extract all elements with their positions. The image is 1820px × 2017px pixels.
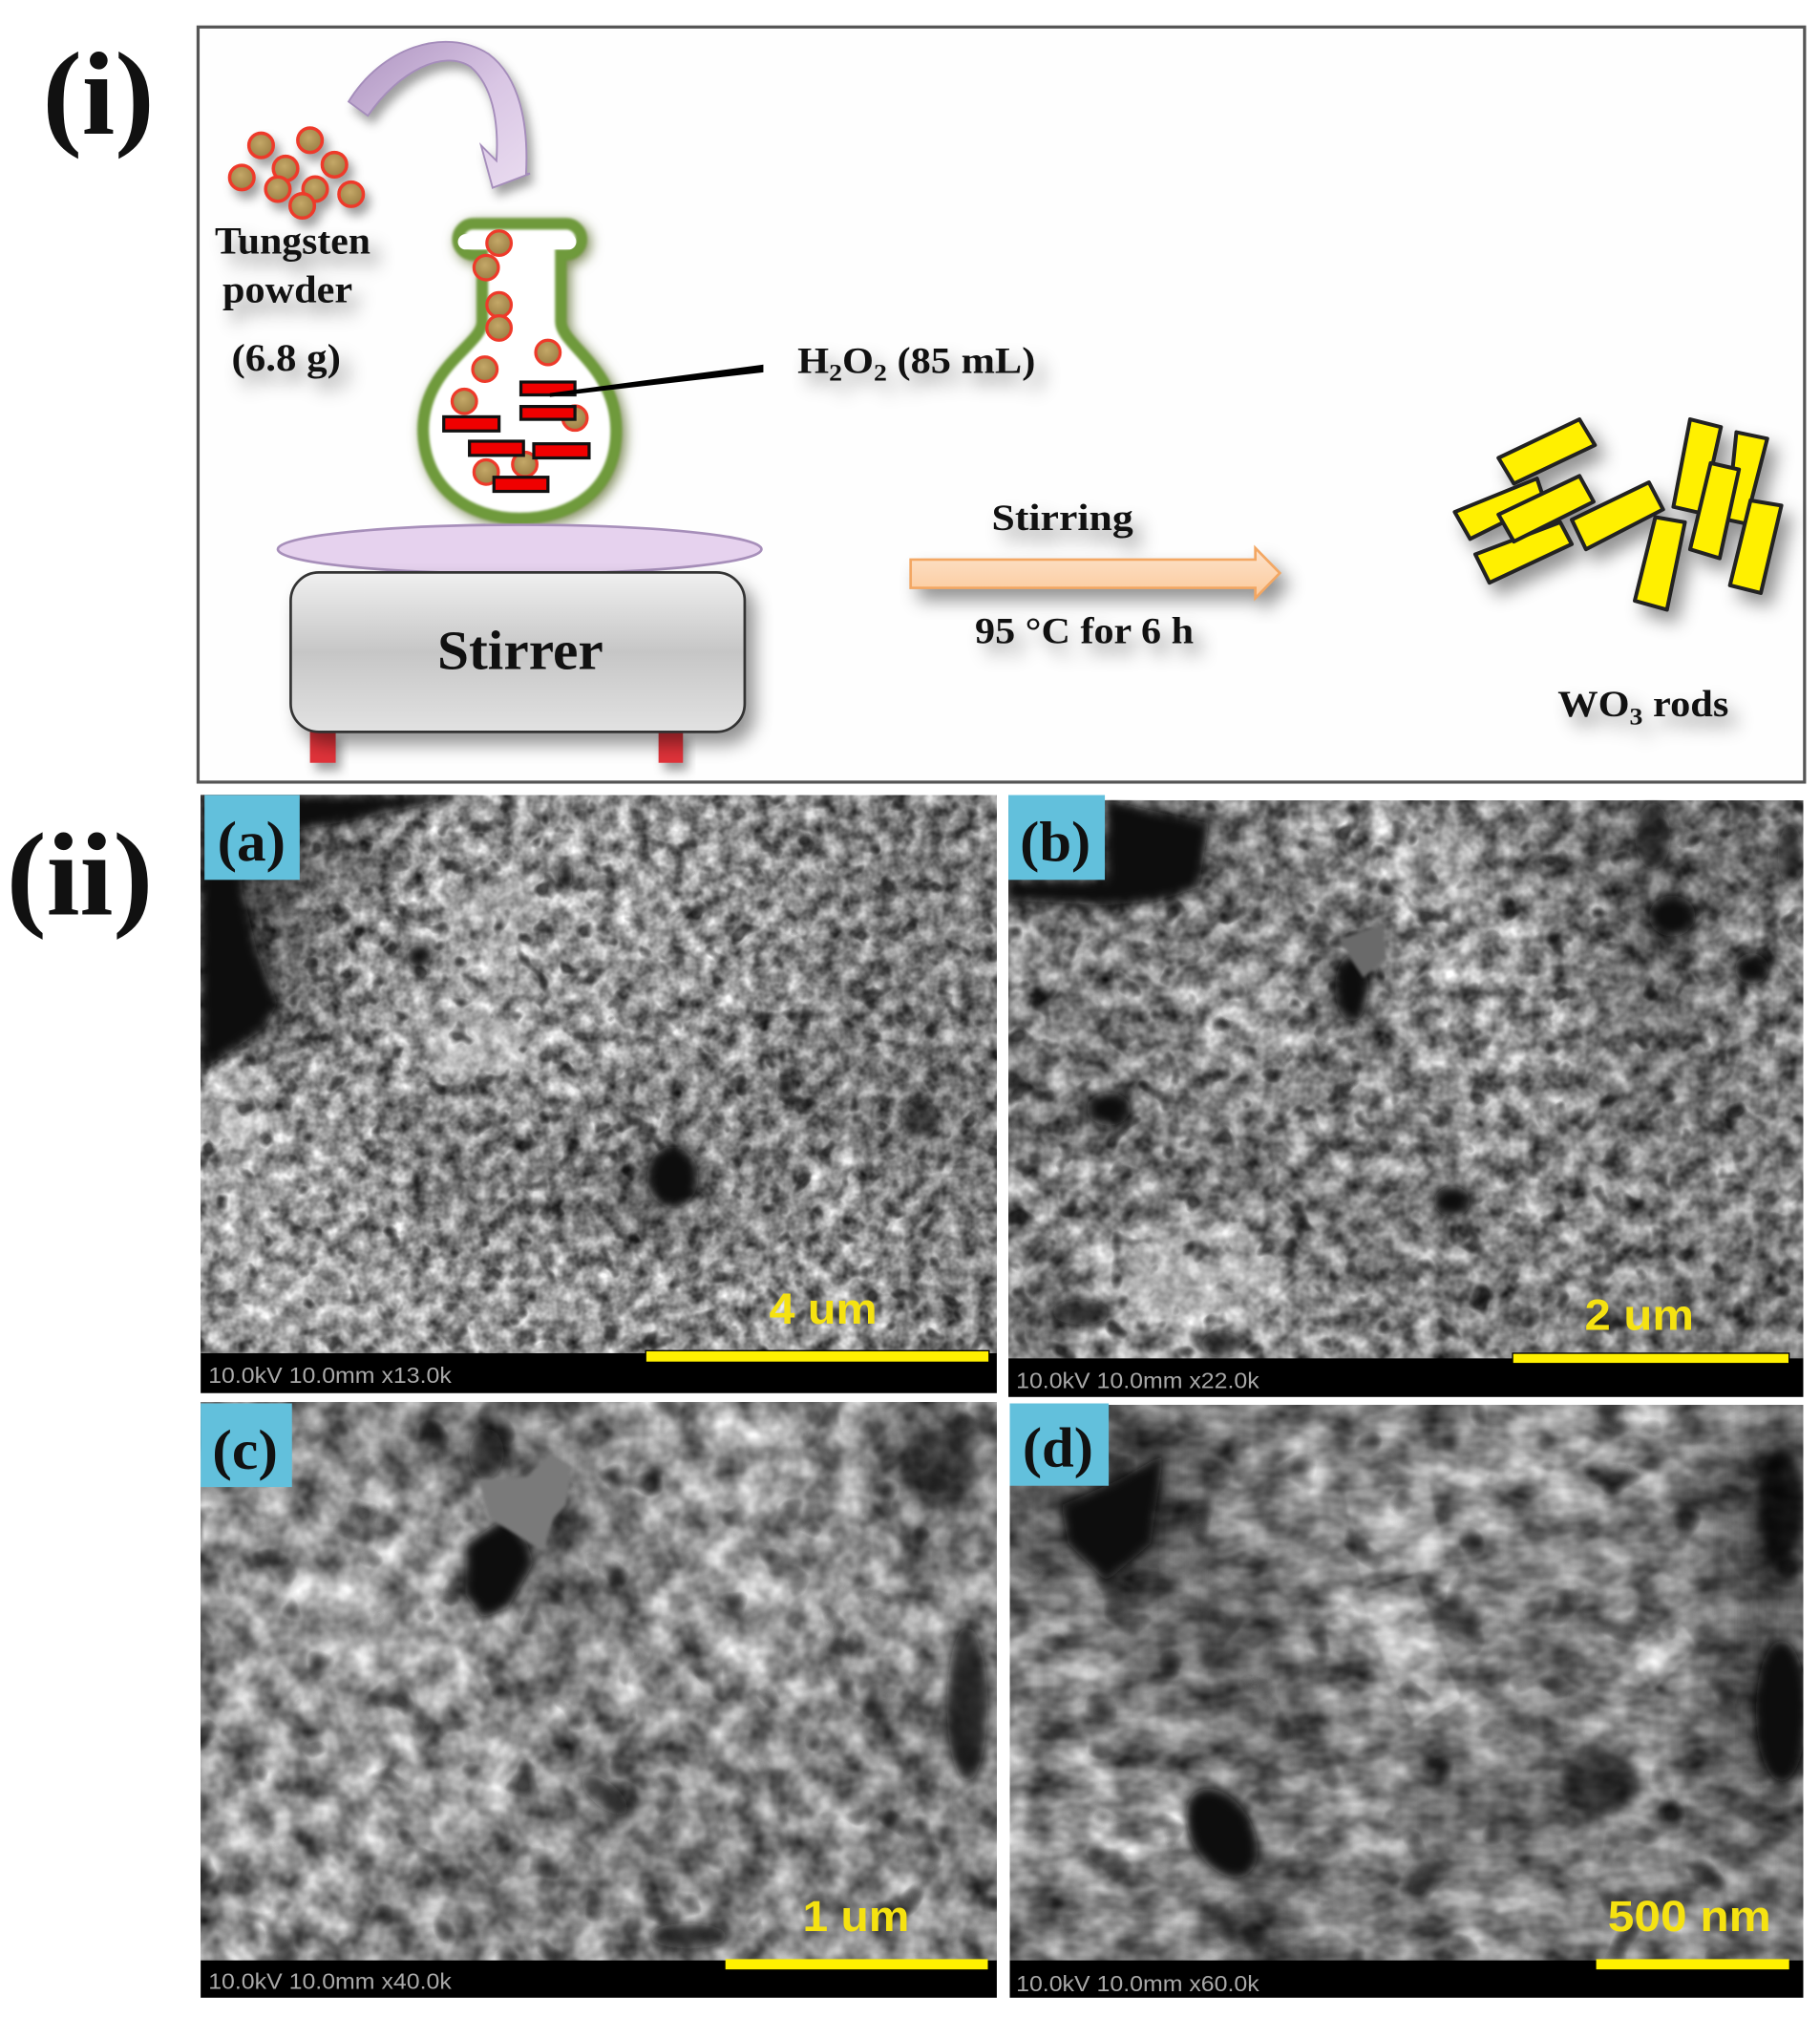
label badge: (b)	[1008, 795, 1105, 880]
heading: (ii): (ii)	[7, 810, 153, 941]
text: stirring: Stirring	[992, 498, 1133, 539]
footer strip with scale bar: 10.0kV 10.0mm x13.0k	[208, 1363, 452, 1388]
arrow: process	[911, 548, 1280, 598]
icon: stirrer body	[290, 572, 745, 763]
text: H2O2 volume: H	[797, 341, 826, 382]
footer strip with scale bar: 10.0kV 10.0mm x60.0k	[1016, 1971, 1259, 1996]
text: tungsten powder	[215, 219, 370, 379]
text: H2O2 volume: 2	[829, 359, 842, 387]
panel: SEM image (b)	[1008, 795, 1803, 1397]
icon: round-bottom flask	[423, 223, 616, 519]
icon: tungsten powder particles	[229, 128, 364, 218]
footer strip with scale bar: 10.0kV 10.0mm x22.0k	[1016, 1368, 1259, 1392]
arrow: curved purple	[349, 42, 530, 188]
heading: (i): (i)	[42, 29, 155, 159]
footer strip with scale bar: 10.0kV 10.0mm x40.0k	[208, 1968, 452, 1993]
panel: synthesis schematic	[198, 27, 1805, 782]
text: H2O2 volume: (85 mL)	[887, 341, 1035, 382]
panel: SEM image (c)	[201, 1402, 997, 1998]
label badge: (d): (d)	[1023, 1416, 1093, 1479]
panel: SEM image (a)	[201, 795, 997, 1393]
text: temperature and time: 95 °C for 6 h	[975, 610, 1194, 651]
text: tungsten powder: Tungsten	[215, 219, 370, 262]
text: H2O2 volume: 2	[874, 359, 887, 387]
label badge: (d)	[1009, 1404, 1109, 1486]
label badge: (c)	[201, 1404, 292, 1487]
footer strip with scale bar	[1009, 1959, 1803, 1998]
icon: WO3 rods	[1454, 419, 1782, 609]
text: WO3 rods: 3	[1630, 702, 1642, 730]
text: tungsten powder: (6.8 g)	[231, 336, 341, 379]
footer strip with scale bar	[201, 1350, 997, 1393]
text: WO3 rods: WO	[1557, 684, 1624, 725]
scale label: 1 um: 1 um	[803, 1892, 909, 1941]
icon: stir plate	[278, 525, 761, 574]
footer strip with scale bar	[201, 1959, 997, 1998]
text: H2O2 volume: O	[842, 341, 874, 382]
panel: SEM image (d)	[1009, 1404, 1808, 1998]
text: WO3 rods: rods	[1642, 684, 1728, 725]
footer strip with scale bar	[1008, 1353, 1803, 1397]
label badge: (c): (c)	[212, 1418, 278, 1481]
scale label: 500 nm: 500 nm	[1608, 1892, 1771, 1941]
label: stirrer: Stirrer	[437, 619, 603, 681]
scale label: 2 um: 2 um	[1584, 1291, 1694, 1340]
scale label: 4 um: 4 um	[770, 1285, 878, 1333]
pointer line: H2O2	[551, 366, 763, 396]
label badge: (a)	[204, 795, 300, 880]
label badge: (a): (a)	[218, 810, 286, 873]
text: tungsten powder: powder	[222, 268, 352, 311]
label badge: (b): (b)	[1020, 810, 1090, 873]
